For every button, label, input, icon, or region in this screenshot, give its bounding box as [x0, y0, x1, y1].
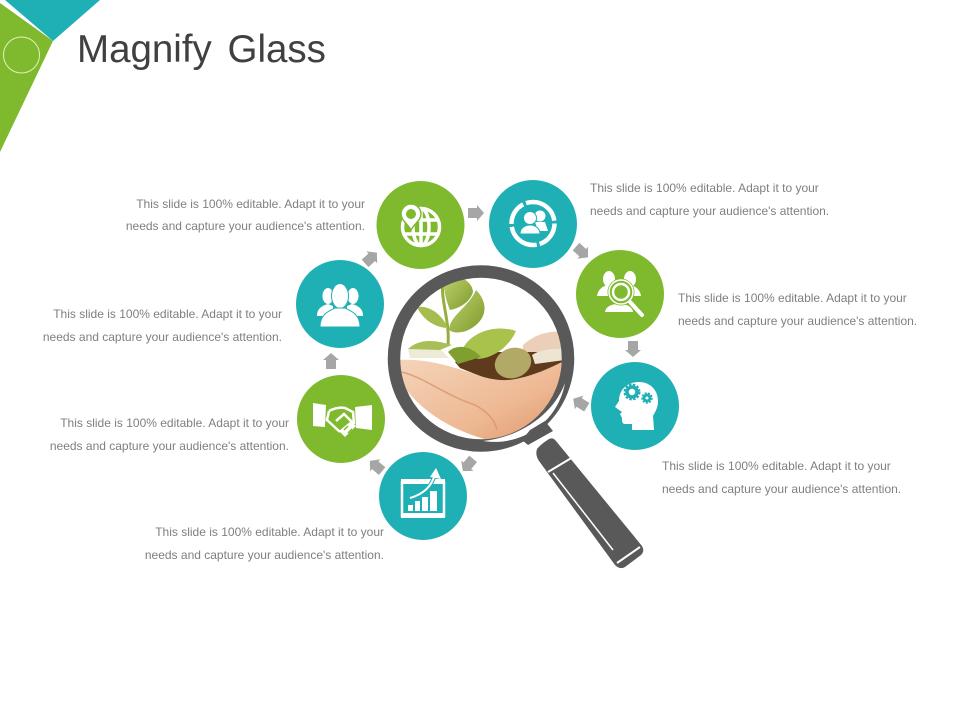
arrow: search to head — [625, 341, 641, 357]
text block: lower right: needs and capture your audience's attention. — [662, 482, 901, 496]
magnifying glass — [394, 272, 643, 568]
arrow: chart to handshake — [365, 455, 387, 477]
icon circle: growth chart — [379, 452, 467, 540]
icon circle: people group — [296, 260, 384, 348]
handle — [536, 438, 643, 568]
photo: hand holding plant and coins — [400, 280, 562, 440]
arrow: globe to team — [468, 205, 484, 221]
text block: upper left: This slide is 100% editable. Adapt it to your — [53, 307, 282, 321]
text block: top right — [590, 181, 829, 218]
title: Magnify Glass — [77, 28, 326, 71]
text block: top right: needs and capture your audience's attention. — [590, 204, 829, 218]
icon circle: globe with pin — [376, 181, 464, 269]
text block: upper left — [43, 307, 282, 344]
icon circle: head with gears — [591, 362, 679, 450]
icon circle: people search — [576, 250, 664, 338]
arrow: people to globe — [360, 247, 382, 269]
arrow: team to search — [571, 241, 593, 263]
text block: middle left: This slide is 100% editable. Adapt it to your — [60, 416, 289, 430]
text block: bottom left: This slide is 100% editable. Adapt it to your — [155, 525, 384, 539]
arrow: handshake to people — [323, 353, 339, 369]
corner decoration — [0, 0, 100, 152]
text block: bottom left: needs and capture your audience's attention. — [145, 548, 384, 562]
text block: upper right: needs and capture your audience's attention. — [678, 314, 917, 328]
text block: bottom left — [145, 525, 384, 562]
arrow: head to lens — [569, 392, 591, 414]
text block: top left: This slide is 100% editable. Adapt it to your — [136, 197, 365, 211]
icon circle: handshake — [297, 375, 385, 463]
text block: middle left — [50, 416, 289, 453]
text block: upper left: needs and capture your audience's attention. — [43, 330, 282, 344]
text block: top left — [126, 197, 365, 233]
text block: lower right: This slide is 100% editable. Adapt it to your — [662, 459, 891, 473]
text block: upper right: This slide is 100% editable. Adapt it to your — [678, 291, 907, 305]
text block: middle left: needs and capture your audience's attention. — [50, 439, 289, 453]
handle collar — [522, 421, 553, 445]
text block: upper right — [678, 291, 917, 328]
text block: lower right — [662, 459, 901, 496]
text block: top left: needs and capture your audience's attention. — [126, 219, 365, 233]
text block: top right: This slide is 100% editable. Adapt it to your — [590, 181, 819, 195]
icon circle: team ring — [489, 180, 577, 268]
arrow: lens to chart — [457, 454, 479, 476]
